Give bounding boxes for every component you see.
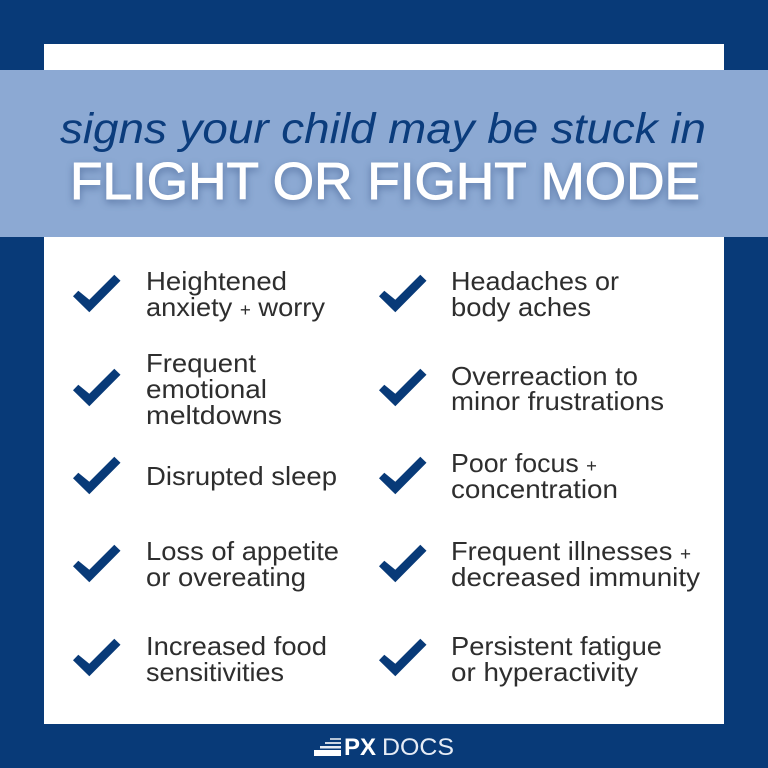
item: emotional meltdowns: Frequent	[146, 348, 257, 378]
item: headaches: body aches	[451, 292, 591, 322]
item: illnesses: Frequent illnesses +	[451, 536, 691, 566]
checklist right column	[379, 266, 700, 687]
item: appetite: Loss of appetite	[146, 536, 339, 566]
item: headaches	[379, 266, 619, 322]
icon: stairs	[314, 738, 341, 756]
title main: FLIGHT OR FIGHT MODE	[70, 153, 700, 211]
item: poor focus	[379, 448, 618, 504]
item: illnesses	[379, 536, 700, 592]
logo text PX: PX	[344, 734, 376, 761]
item: fatigue: or hyperactivity	[451, 657, 638, 687]
item: disrupted sleep	[73, 457, 337, 494]
item: fatigue	[379, 631, 662, 687]
item: poor focus: Poor focus +	[451, 448, 597, 478]
logo text DOCS: DOCS	[382, 734, 454, 761]
item: overreaction: minor frustrations	[451, 386, 664, 416]
item: poor focus: concentration	[451, 474, 618, 504]
checklist left column	[73, 266, 339, 687]
item: overreaction	[379, 361, 664, 416]
item: headaches: Headaches or	[451, 266, 619, 296]
title subtitle: signs your child may be stuck in	[60, 105, 706, 153]
item: food sensitivities: sensitivities	[146, 657, 284, 687]
item: illnesses: decreased immunity	[451, 562, 700, 592]
item: heightened anxiety	[73, 266, 325, 322]
item: heightened anxiety: anxiety + worry	[146, 292, 325, 322]
item: fatigue: Persistent fatigue	[451, 631, 662, 661]
footer logo	[314, 734, 454, 761]
item: heightened anxiety: Heightened	[146, 266, 287, 296]
item: appetite: or overeating	[146, 562, 306, 592]
title banner	[0, 70, 768, 237]
item: emotional meltdowns	[73, 348, 282, 430]
item: emotional meltdowns: meltdowns	[146, 400, 282, 430]
item: appetite	[73, 536, 339, 592]
item: food sensitivities	[73, 631, 327, 687]
white panel	[44, 44, 724, 724]
item: food sensitivities: Increased food	[146, 631, 327, 661]
item: overreaction: Overreaction to	[451, 361, 638, 391]
item: emotional meltdowns: emotional	[146, 374, 267, 404]
item: disrupted sleep: Disrupted sleep	[146, 461, 337, 491]
